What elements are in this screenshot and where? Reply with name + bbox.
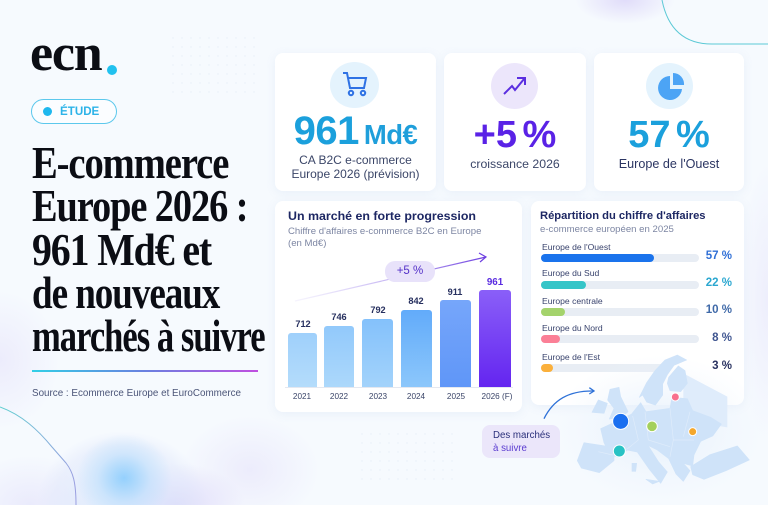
text: 911	[448, 287, 462, 297]
text: 22 %	[706, 277, 732, 289]
text: 842	[408, 296, 424, 306]
logo: ecn	[30, 25, 101, 82]
caption: croissance 2026	[470, 157, 560, 171]
chart heading: Un marché en forte progression	[288, 209, 476, 223]
map of Europe	[544, 354, 750, 484]
caption: CA B2C e-commerce	[299, 153, 412, 167]
caption	[291, 153, 420, 181]
badge: étude	[31, 99, 117, 124]
text: Europe de l'Est	[542, 352, 600, 362]
callout	[482, 425, 560, 458]
panel: 57 %	[594, 53, 744, 191]
value: 57 %	[628, 114, 710, 156]
title: de nouveaux	[32, 267, 219, 318]
title: E-commerce	[32, 137, 228, 188]
text: 2024	[407, 392, 425, 401]
growth pill	[385, 261, 435, 282]
title	[32, 137, 265, 361]
text: Europe centrale	[542, 296, 603, 306]
chart subtitle: (en Md€)	[288, 238, 326, 249]
map dots	[613, 393, 697, 457]
text: 2025	[447, 392, 465, 401]
bar values: 712	[295, 319, 311, 329]
region labels: Europe de l'Ouest	[542, 242, 611, 252]
chart subtitle: Chiffre d'affaires e-commerce B2C en Europe	[288, 226, 481, 237]
text: 2023	[369, 392, 387, 401]
text: 792	[370, 305, 386, 315]
caption: Europe de l'Ouest	[619, 157, 719, 171]
panel heading: Répartition du chiffre d'affaires	[540, 210, 706, 222]
badge: étude: ÉTUDE	[60, 105, 99, 118]
text: 746	[331, 312, 347, 322]
title: marchés à suivre	[32, 310, 265, 361]
text: 961	[487, 277, 503, 288]
percentages: 57 %	[706, 250, 732, 262]
icon: pie	[646, 63, 693, 109]
panel subtitle: e-commerce européen en 2025	[540, 224, 674, 235]
value: +5 %	[474, 114, 556, 156]
title: 961 Md€ et	[32, 224, 211, 274]
text: Europe du Nord	[542, 323, 603, 333]
trend arrow	[295, 252, 487, 302]
icon: cart	[330, 62, 379, 108]
panel: bar chart	[275, 201, 522, 412]
icon: trend	[491, 63, 538, 109]
year labels: 2021	[293, 392, 311, 401]
text: Europe du Sud	[542, 268, 599, 278]
panel: répartition	[531, 201, 744, 405]
logo dot	[107, 65, 117, 75]
text: 2022	[330, 392, 348, 401]
chart subtitle	[288, 226, 481, 249]
text: 10 %	[706, 304, 732, 316]
text: 3 %	[712, 360, 732, 372]
callout: Des marchés	[493, 430, 550, 441]
source: Source : Ecommerce Europe et EuroCommerce	[32, 388, 241, 399]
panel: +5 %	[444, 53, 586, 191]
panel: 961 Md€	[275, 53, 436, 191]
caption: Europe 2026 (prévision)	[291, 167, 420, 181]
bars	[288, 333, 317, 387]
gradient divider	[32, 370, 258, 372]
callout: à suivre	[493, 442, 527, 454]
text: 8 %	[712, 332, 732, 344]
value: 961 Md€	[294, 109, 417, 153]
text: 2026 (F)	[482, 392, 512, 401]
fills	[541, 254, 654, 262]
title: Europe 2026 :	[32, 180, 247, 231]
growth pill: +5 %	[397, 265, 423, 277]
curved arrow	[544, 388, 594, 419]
axis	[285, 387, 513, 388]
tracks	[541, 254, 699, 262]
